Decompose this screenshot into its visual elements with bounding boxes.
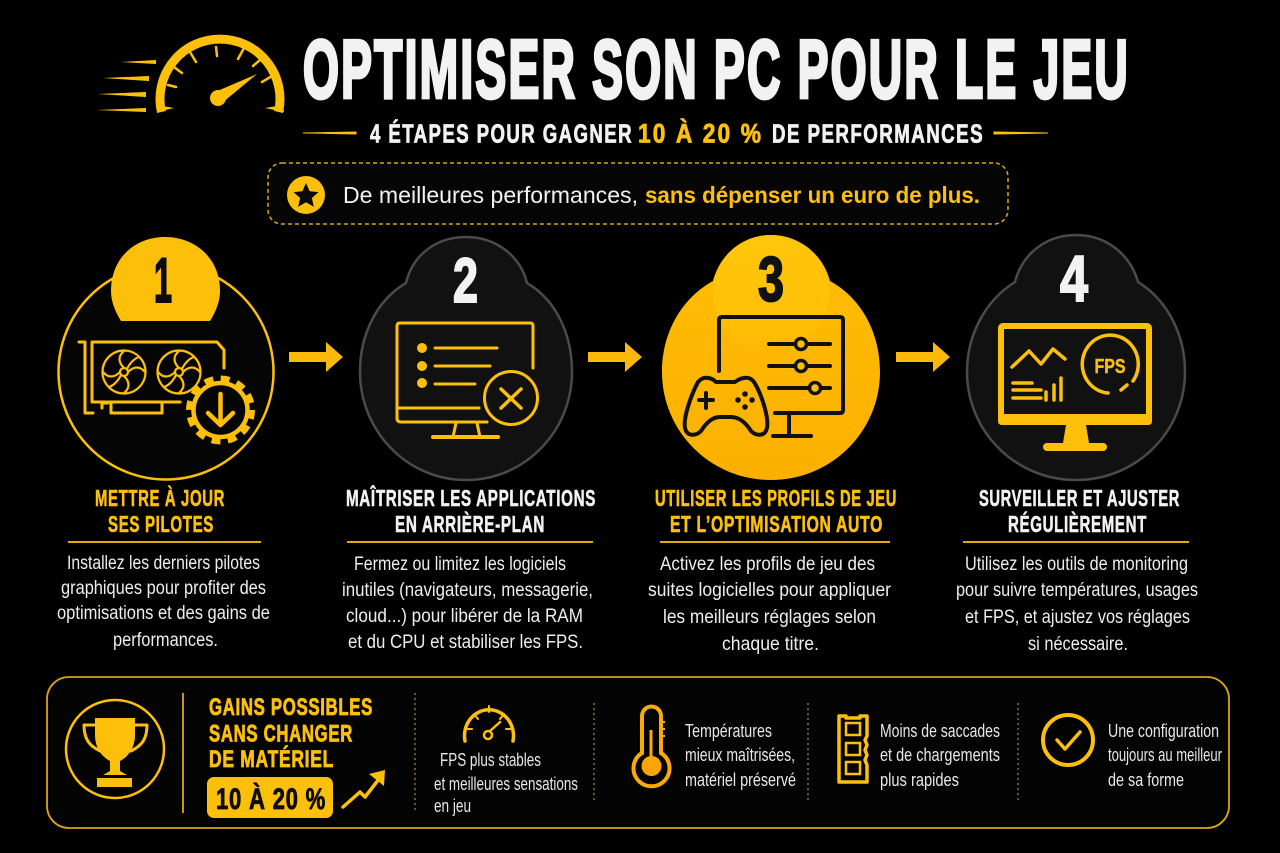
step 4 text: RÉGULIÈREMENT [1008,510,1147,537]
step 3 text: chaque titre. [722,634,819,655]
step 3 text: suites logicielles pour appliquer [648,580,892,601]
icon: rising arrow [343,770,385,807]
subtitle: DE PERFORMANCES [772,118,984,148]
benefit: configuration: toujours au meilleur [1108,745,1222,765]
step 4 text [956,485,1198,655]
icon: trophy [66,700,164,798]
step 4 number: 4 [1060,242,1088,315]
gains badge: 10 À 20 % [216,782,326,816]
gains heading: DE MATÉRIEL [209,745,334,773]
step 1 text: performances. [113,630,218,651]
callout: De meilleures performances, [343,182,638,208]
subtitle: 10 À 20 % [638,118,763,148]
callout [268,163,1008,224]
icon: check circle [1043,715,1093,765]
step 2 text: inutiles (navigateurs, messagerie, [342,580,593,601]
benefit: loading: Moins de saccades [880,721,1000,741]
step 3 text: Activez les profils de jeu des [660,554,875,575]
step 3 text: UTILISER LES PROFILS DE JEU [655,485,897,511]
arrow 3 to 4 [896,342,950,372]
step 1 circle [58,237,274,480]
step 1 text: SES PILOTES [108,511,214,537]
benefit: configuration: de sa forme [1108,770,1184,790]
benefit: temperatures: matériel préservé [685,770,796,790]
benefit: loading: plus rapides [880,770,959,790]
gains badge [207,777,333,818]
step 4 text: pour suivre températures, usages [956,580,1198,601]
icon: small gauge [464,706,514,741]
benefit: temperatures: Températures [685,721,772,741]
icon: thermometer [633,706,669,786]
subtitle [303,118,1048,148]
step 1 text [57,484,270,651]
step 1 number tab [111,237,220,321]
arrow 2 to 3 [588,342,642,372]
step 3 number: 3 [758,245,784,315]
step 4 text: et FPS, et ajustez vos réglages [965,607,1190,628]
step 1 text: Installez les derniers pilotes [67,553,260,574]
step 2 text: MAÎTRISER LES APPLICATIONS [346,484,596,511]
step 1 text: optimisations et des gains de [57,603,270,624]
benefit: FPS [434,750,578,816]
benefit: FPS: FPS plus stables [440,750,541,770]
icon: star [287,176,325,214]
icon: RAM module [839,716,867,782]
step 1 text: METTRE À JOUR [95,484,225,511]
step 3 text: ET L’OPTIMISATION AUTO [670,511,883,537]
icon: monitor with closed app [397,323,538,437]
icon: sliders monitor and gamepad [685,317,843,436]
panel: gains [47,677,1229,828]
benefit: configuration [1108,721,1222,790]
gains heading: GAINS POSSIBLES [209,694,373,721]
icon: graphics card and update gear [79,342,252,442]
step 3 circle [662,235,880,480]
benefit: FPS: et meilleures sensations [434,774,578,794]
step 4 text: Utilisez les outils de monitoring [965,554,1188,575]
subtitle: 4 ÉTAPES POUR GAGNER [370,118,633,148]
benefit: configuration: Une configuration [1108,721,1219,741]
icon: speedometer [96,39,284,112]
icon: monitor with FPS gauge [998,326,1152,451]
step 2 circle [360,237,572,480]
step 1 text: graphiques pour profiter des [61,578,266,599]
step 3 text [648,485,897,655]
benefit: loading [880,721,1000,790]
step 2 number: 2 [453,246,478,316]
step 4 text: si nécessaire. [1028,634,1128,655]
arrow 1 to 2 [289,342,343,372]
step 3 text: les meilleurs réglages selon [663,607,876,628]
gains heading: SANS CHANGER [209,720,353,748]
benefit: temperatures: mieux maîtrisées, [685,745,795,765]
step 2 text: EN ARRIÈRE-PLAN [395,510,545,537]
icon: monitor with FPS gauge: FPS [1094,356,1126,378]
benefit: loading: et de chargements [880,745,1000,765]
benefit: FPS: en jeu [434,796,471,816]
step 2 text: Fermez ou limitez les logiciels [354,554,566,575]
step 4 circle [967,235,1185,480]
callout: sans dépenser un euro de plus. [645,182,980,208]
benefit: temperatures [685,721,796,790]
step 2 text: et du CPU et stabiliser les FPS. [348,632,583,653]
gains heading [209,694,373,773]
step 1 number: 1 [154,246,172,316]
step 2 text [342,484,596,653]
step 2 text: cloud...) pour libérer de la RAM [346,606,583,627]
